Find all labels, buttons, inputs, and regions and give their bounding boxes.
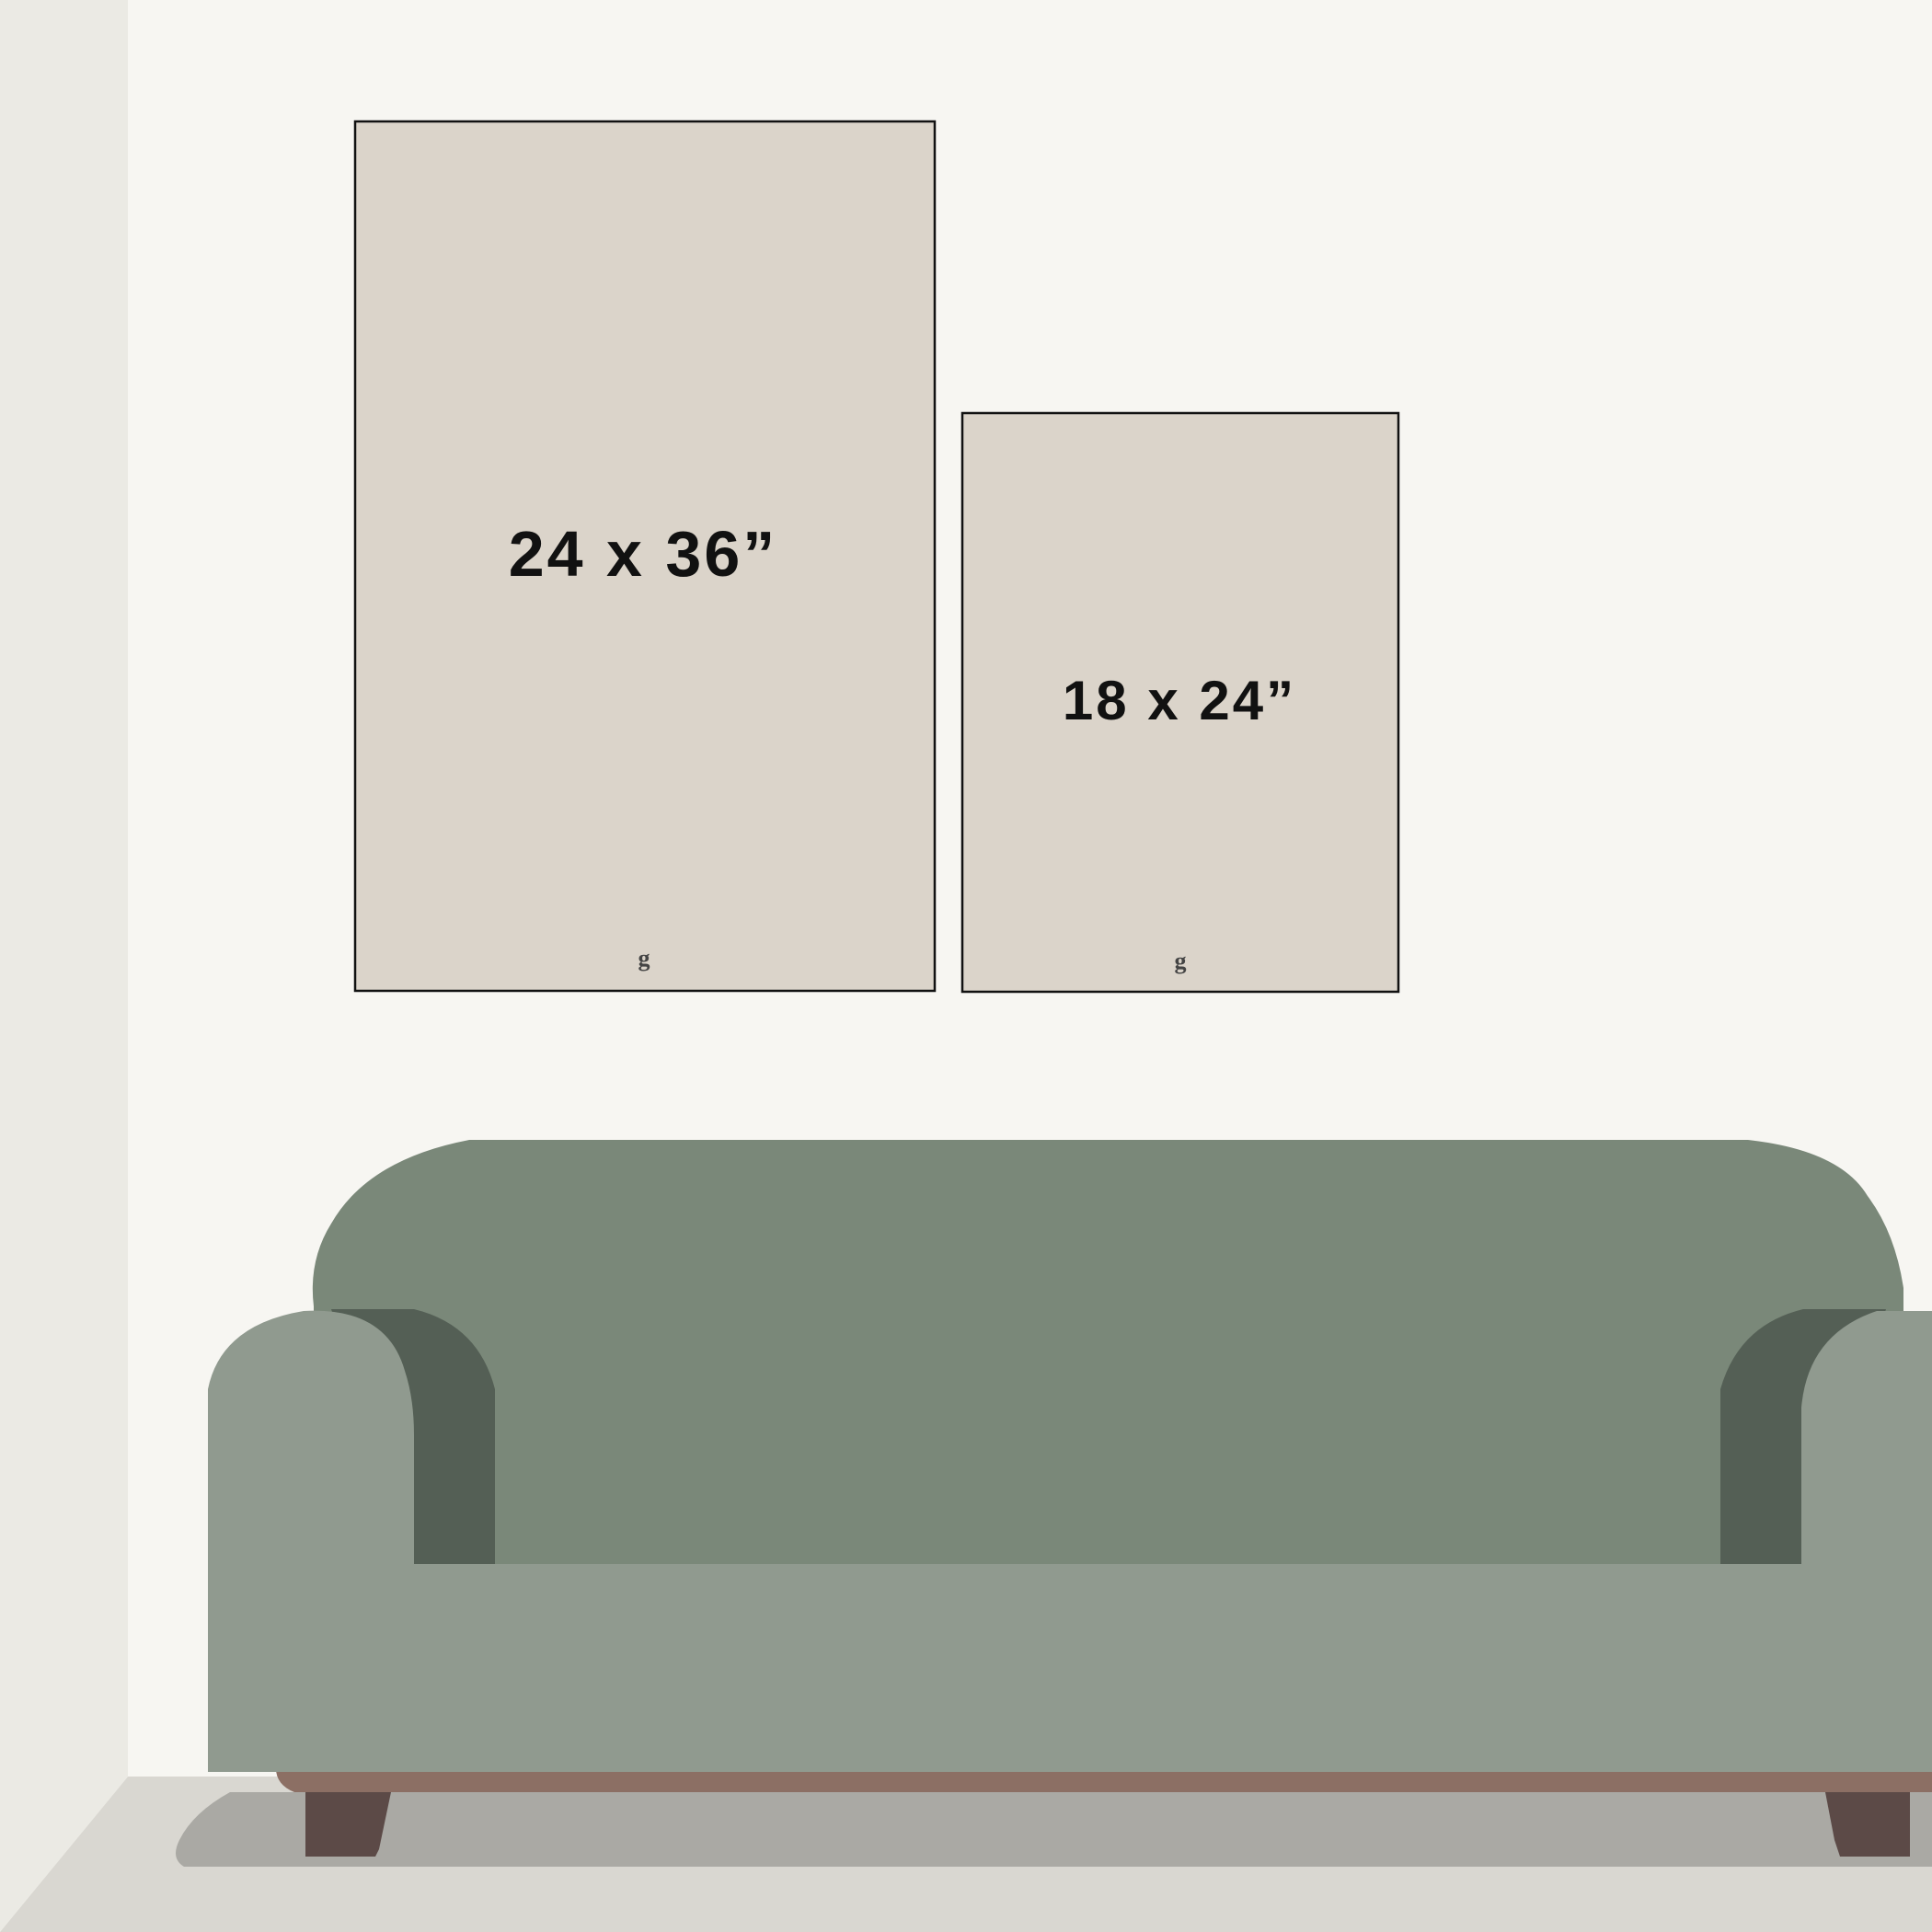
inner dark side left bbox=[331, 1309, 495, 1564]
left arm bbox=[208, 1311, 414, 1772]
right leg bbox=[1825, 1792, 1910, 1857]
inner dark side right bbox=[1720, 1309, 1886, 1564]
logo g: g bbox=[1174, 948, 1187, 974]
poster frame: 24 x 36 bbox=[355, 121, 935, 991]
logo g: g bbox=[638, 945, 650, 972]
sofa bbox=[176, 1140, 1932, 1867]
label: 18 x 24: 18 x 24” bbox=[1063, 670, 1296, 731]
left wall bbox=[0, 0, 128, 1932]
base rail bbox=[276, 1768, 1932, 1792]
seat bbox=[208, 1564, 1932, 1772]
right arm bbox=[1801, 1311, 1932, 1772]
back bbox=[313, 1140, 1903, 1564]
left leg bbox=[305, 1792, 391, 1857]
label: 24 x 36: 24 x 36” bbox=[509, 518, 777, 590]
floor shadow bbox=[176, 1792, 1932, 1867]
floor bbox=[0, 1777, 1932, 1932]
poster frame: 18 x 24 bbox=[962, 413, 1398, 992]
